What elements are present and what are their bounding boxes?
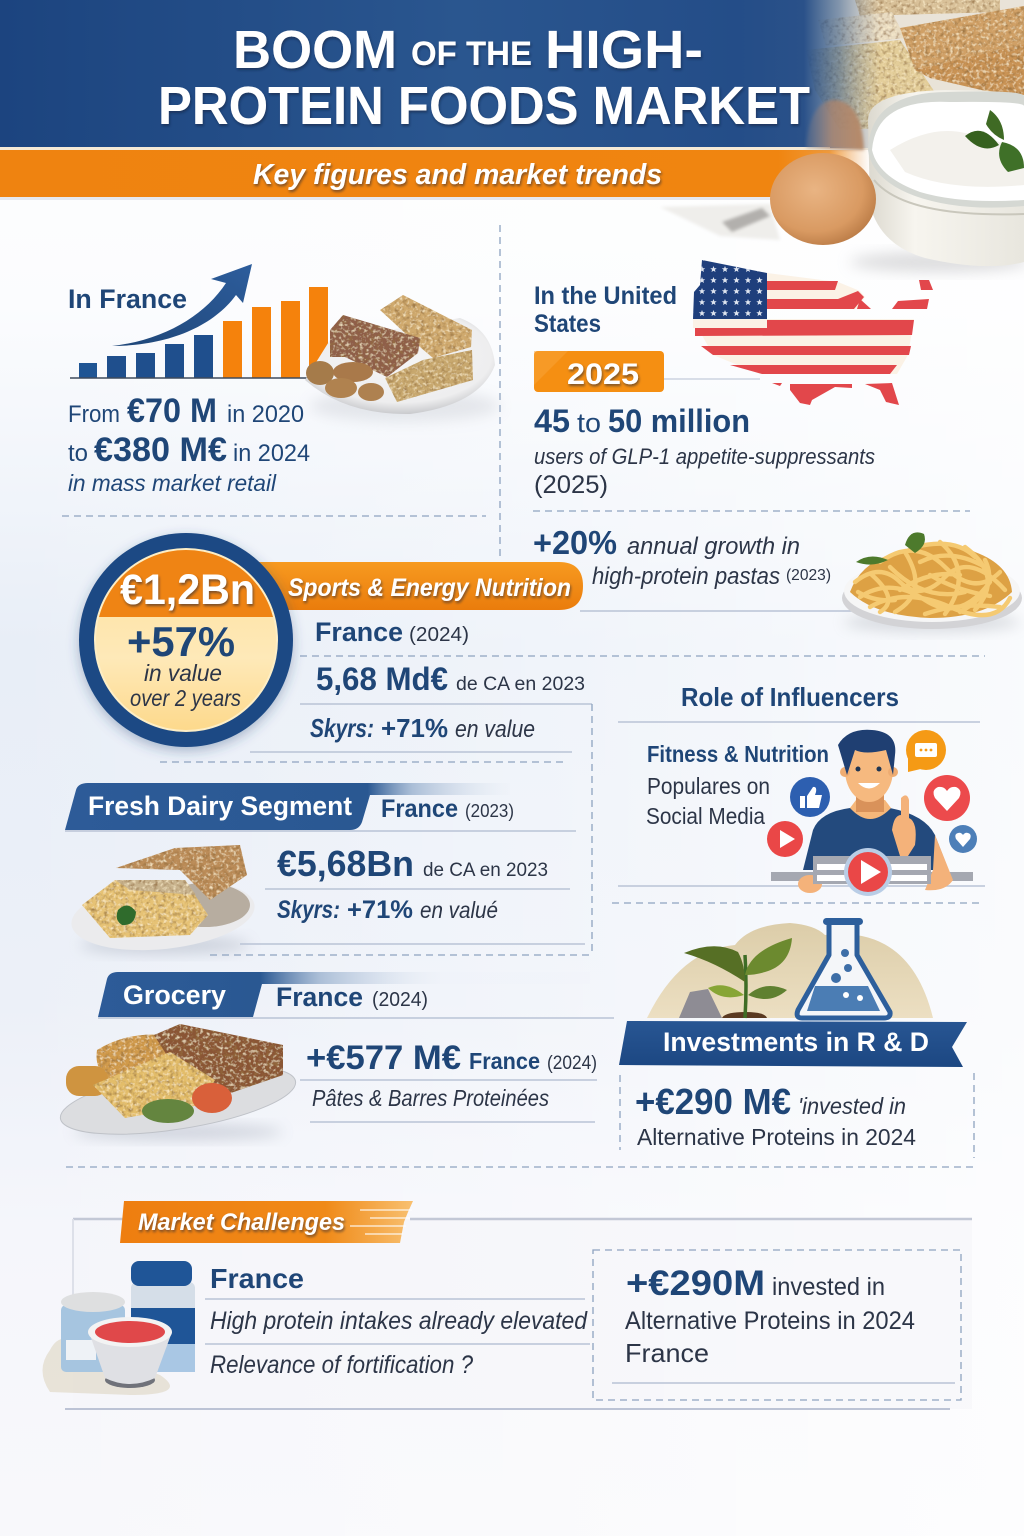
figure: +20% annual growth: high-protein pastas <box>592 563 780 590</box>
figures: 70M to 380M: From <box>68 401 120 428</box>
subtitle: Key figures and market trends <box>253 159 662 191</box>
panel: Grocery <box>56 972 614 1147</box>
figures: +€290 M€: Alternative Proteins in 2024 <box>637 1124 916 1150</box>
callout: €1,2Bn circle: €1,2Bn <box>120 566 255 614</box>
person <box>798 730 953 893</box>
figures: France 2024 <box>310 617 585 743</box>
figures: +€290 M€ <box>635 1081 916 1150</box>
figure: 45 to 50 million: 45 <box>534 403 570 439</box>
figure: +20% annual growth: annual growth in <box>627 533 800 560</box>
illustration: supplements and cup <box>42 1261 195 1395</box>
icon: video player <box>813 848 931 896</box>
title: OF THE <box>411 35 532 73</box>
icon: play <box>767 821 803 857</box>
icon: screen bar <box>771 872 973 881</box>
ribbon: Investments in R&D <box>619 1021 967 1067</box>
figures: +€577 M€: Pâtes & Barres Proteinées <box>312 1085 549 1111</box>
figure: 45 to 50 million: to <box>577 408 601 438</box>
illustration: dome, plant and flask <box>647 918 933 1018</box>
tab: Fresh Dairy Segment <box>65 783 510 830</box>
panel: Market Challenges <box>42 1201 972 1409</box>
image: pasta plate <box>842 532 1022 632</box>
icon: growth arrow <box>112 264 252 346</box>
callout: +€290M dashed box: +€290M <box>626 1264 765 1303</box>
label: France 2024: (2024) <box>372 989 428 1011</box>
image: grocery plate <box>56 1024 300 1147</box>
panel: Investments in R&D <box>619 918 974 1158</box>
icon: thumbs up <box>790 777 830 817</box>
label: France 2023: France <box>381 795 458 823</box>
panel: In the United States <box>533 260 1022 632</box>
label: France 2024 <box>276 982 428 1012</box>
callout: €1,2Bn circle: in value <box>144 660 222 686</box>
figures: 70M to 380M: €70 M <box>127 392 217 430</box>
text: Fitness & Nutrition: Populares on <box>647 773 770 799</box>
banner: Sports & Energy Nutrition <box>255 562 583 610</box>
map: USA flag <box>693 260 933 405</box>
title: BOOM <box>233 20 397 80</box>
illustration: influencer with social icons <box>767 730 977 896</box>
callout: +€290M dashed box: France <box>625 1338 709 1368</box>
figures: France 2024: +71% <box>381 713 448 743</box>
callout: +€290M dashed box: Alternative Proteins in 2024 <box>625 1307 915 1335</box>
image: protein bars plate <box>305 295 500 422</box>
image: dairy plate <box>68 845 258 958</box>
ribbon: Investments in R&D: Investments in R & D <box>663 1027 929 1057</box>
callout: €1,2Bn circle <box>79 533 293 747</box>
figures: +€577 M€: France <box>469 1048 540 1074</box>
header banner <box>0 0 1024 200</box>
figures: +€577 M€: (2024) <box>547 1053 597 1074</box>
bar chart: growth 2020 to 2024 <box>70 287 328 378</box>
figures: 70M to 380M: in 2024 <box>233 440 310 467</box>
figure: 45 to 50 million: (2025) <box>534 471 608 499</box>
label: France 2023: (2023) <box>465 801 514 821</box>
text: France challenges: Relevance of fortification ? <box>210 1351 473 1379</box>
figures: France 2024: 5,68 Md€ <box>316 661 448 697</box>
figures: +€577 M€ <box>306 1039 597 1111</box>
panel: Sports & Energy Nutrition <box>79 533 585 747</box>
title: PROTEIN FOODS MARKET <box>158 76 810 136</box>
badge: 2025: 2025 <box>567 358 639 391</box>
figures: 70M to 380M: in mass market retail <box>68 470 277 496</box>
figure: +20% annual growth <box>533 524 831 590</box>
text: Fitness & Nutrition <box>646 741 829 829</box>
heading: In the United States: States <box>534 310 601 338</box>
label: France 2024: France <box>276 982 363 1012</box>
figure: +20% annual growth: (2023) <box>786 567 831 584</box>
figures: France 2024: France <box>315 617 403 647</box>
icon: small heart <box>949 825 977 853</box>
text: France challenges: High protein intakes already elevated <box>210 1307 588 1335</box>
callout: €1,2Bn circle: +57% <box>127 618 235 665</box>
figures: €5,68Bn and Skyrs: Skyrs: <box>277 896 340 924</box>
hero food photo: snack bars behind the header <box>660 0 1024 240</box>
figures: 70M to 380M <box>68 392 310 496</box>
banner: Sports & Energy Nutrition: Sports & Energy Nutrition <box>288 574 571 602</box>
text: France challenges <box>210 1263 588 1379</box>
label: France 2023 <box>381 795 514 823</box>
figures: €5,68Bn and Skyrs <box>277 843 548 924</box>
callout: €1,2Bn circle: over 2 years <box>130 685 241 711</box>
figures: +€290 M€: 'invested in <box>798 1093 906 1119</box>
heading: Role of Influencers: Role of Influencers <box>681 682 899 712</box>
figures: France 2024: (2024) <box>409 624 469 646</box>
long dashed divider <box>300 655 985 657</box>
figures: €5,68Bn and Skyrs: de CA en 2023 <box>423 860 548 881</box>
panel: Role of Influencers <box>618 682 985 896</box>
text: France challenges: France <box>210 1263 304 1294</box>
badge: 2025 <box>534 351 760 392</box>
figures: €5,68Bn and Skyrs: en valué <box>420 897 498 923</box>
tag: Market Challenges: Market Challenges <box>138 1209 345 1236</box>
figures: €5,68Bn and Skyrs: +71% <box>347 896 413 924</box>
figures: France 2024: de CA en 2023 <box>456 674 585 695</box>
panel: In France <box>68 264 500 496</box>
text: Fitness & Nutrition: Fitness & Nutrition <box>647 741 829 767</box>
figures: +€290 M€: +€290 M€ <box>635 1081 791 1122</box>
callout: +€290M dashed box: invested in <box>772 1273 885 1301</box>
orange subtitle band <box>0 150 1024 197</box>
figures: 70M to 380M: to <box>68 440 88 467</box>
hero food photo: yogurt jar and eggs <box>770 90 1024 272</box>
figure: 45 to 50 million <box>534 403 875 499</box>
callout: +€290M dashed box <box>593 1250 961 1400</box>
text: Fitness & Nutrition: Social Media <box>646 803 765 829</box>
vertical divider <box>499 225 501 556</box>
figures: 70M to 380M: €380 M€ <box>94 431 227 469</box>
figures: +€577 M€: +€577 M€ <box>306 1039 461 1077</box>
icon: chat bubble <box>906 730 946 772</box>
tag: Market Challenges <box>120 1201 413 1243</box>
tab: Grocery: Grocery <box>123 980 226 1010</box>
tab: Grocery <box>98 972 590 1017</box>
figures: €5,68Bn and Skyrs: €5,68Bn <box>277 843 414 884</box>
figures: France 2024: Skyrs: <box>310 713 374 743</box>
title <box>158 20 810 136</box>
figure: 45 to 50 million: 50 million <box>608 403 750 439</box>
title: HIGH- <box>545 20 703 80</box>
figures: France 2024: en value <box>455 716 535 743</box>
tab: Fresh Dairy Segment: Fresh Dairy Segment <box>88 791 352 821</box>
heading: In the United States <box>534 282 677 338</box>
figures: 70M to 380M: in 2020 <box>227 401 304 428</box>
heading: In France: In France <box>68 284 187 314</box>
heading: In the United States: In the United <box>534 282 677 310</box>
figure: +20% annual growth: +20% <box>533 524 617 561</box>
icon: heart <box>924 775 970 821</box>
figure: 45 to 50 million: users of GLP-1 appetite-suppressants <box>534 444 875 469</box>
panel: Fresh Dairy Segment <box>65 783 585 958</box>
